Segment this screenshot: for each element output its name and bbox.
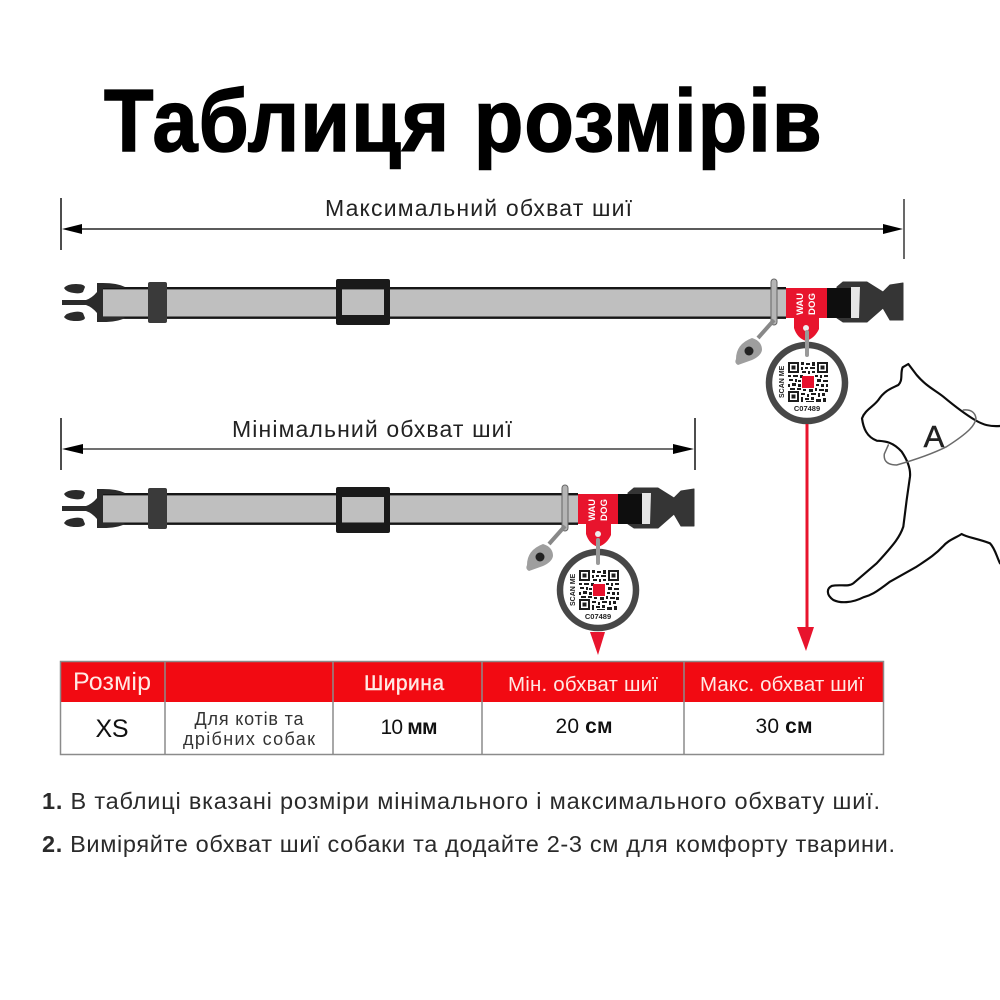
- QR pet tag: SCAN ME: [779, 365, 786, 398]
- title: Таблиця розмірів: [104, 71, 822, 170]
- QR pet tag: [769, 330, 845, 421]
- neck measure loop: [884, 410, 976, 465]
- black webbing and side-release buckle: [827, 282, 903, 322]
- header: max neck: Макс. обхват шиї: [700, 673, 864, 696]
- QR pet tag: C07489: [794, 404, 820, 413]
- note 1: 1. В таблиці вказані розміри мінімального і максимального обхвату шиї.: [42, 788, 880, 814]
- QR pet tag: C07489: [585, 612, 611, 621]
- QR pet tag: SCAN ME: [570, 573, 577, 606]
- cell: width value: 10 мм: [380, 716, 438, 739]
- label: minimum neck girth: Мінімальний обхват шиї: [232, 416, 513, 442]
- metal ring and bell: [735, 279, 777, 365]
- cat silhouette: [828, 364, 1000, 602]
- label: A: A: [924, 419, 945, 454]
- cell: XS: XS: [96, 715, 128, 743]
- black webbing and side-release buckle: [618, 488, 694, 528]
- strap keeper: [148, 282, 167, 323]
- label: maximum neck girth: Максимальний обхват шиї: [325, 195, 633, 221]
- strap keeper: [148, 488, 167, 529]
- collar: maximum length: [62, 279, 903, 421]
- red tag: [786, 288, 827, 341]
- header: size: Розмір: [73, 668, 151, 696]
- clip buckle: [62, 489, 125, 528]
- red tag: WAU: [795, 293, 806, 315]
- clip buckle: [62, 283, 125, 322]
- slider: [336, 487, 390, 533]
- size table: [60, 661, 884, 755]
- dimension arrow: minimum neck girth: [60, 418, 696, 470]
- red tag: DOG: [599, 499, 610, 521]
- red tag: DOG: [807, 293, 818, 315]
- red tag: WAU: [587, 499, 598, 521]
- collar: minimum length: [62, 485, 694, 628]
- cell: description: [183, 709, 315, 749]
- table frame: [60, 661, 884, 755]
- collar strap: [103, 493, 578, 525]
- table header: [60, 661, 884, 702]
- header: width: Ширина: [364, 672, 444, 695]
- note 2: 2. Виміряйте обхват шиї собаки та додайте 2-3 см для комфорту тварини.: [42, 831, 895, 857]
- collar strap: [103, 287, 786, 319]
- dimension arrow: maximum neck girth: [60, 198, 905, 259]
- red tag: [578, 494, 619, 547]
- cat outline with neck measure: [828, 364, 1000, 602]
- cell: description: дрібних собак: [183, 729, 315, 749]
- red pointer arrow: maximum: [797, 424, 814, 651]
- cell: description: Для котів та: [194, 709, 304, 729]
- cell: max value: 30 см: [756, 715, 812, 738]
- header: min neck: Мін. обхват шиї: [508, 673, 658, 696]
- red pointer arrow: minimum: [590, 632, 605, 655]
- QR pet tag: [560, 538, 636, 628]
- slider: [336, 279, 390, 325]
- metal ring and bell: [526, 485, 568, 571]
- cell: min value: 20 см: [556, 715, 612, 738]
